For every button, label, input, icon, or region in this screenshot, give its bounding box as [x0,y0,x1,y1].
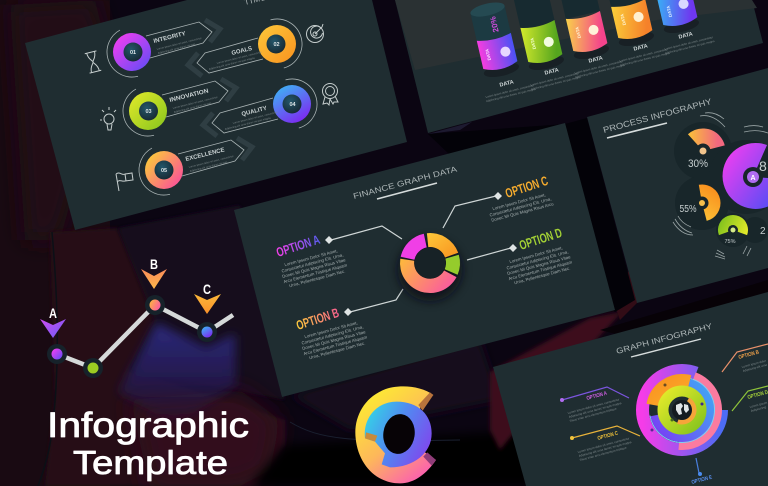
option A [274,232,350,289]
option labels [586,350,768,486]
icon: target [306,24,324,42]
sector: 55 percent [680,189,716,217]
option C: Lorem Ipsum Dolor Sit Amet, [492,192,546,211]
step 05: excellence: 05 [161,168,167,174]
sector: 55 percent: 55% [680,204,697,215]
option D [504,225,575,286]
step 02: goals: Lorem ipsum dolor sit amet, consectetur [216,50,262,65]
arrow A [40,319,66,338]
finance underline [377,183,437,199]
option labels: OPTION A [586,391,608,402]
step 01: integrity: INTEGRITY [153,31,187,45]
step 04: quality: QUALITY [241,106,268,118]
node C [197,322,217,342]
option C: OPTION C [503,173,550,201]
option D: OPTION D [517,225,564,253]
data captions: Adipiscing elit urna donec mi quis magna [665,39,715,55]
option dots [560,398,564,402]
data labels [499,31,694,89]
data captions [485,35,715,103]
option B: Lorem Ipsum Dolor Sit Amet, [304,320,358,339]
step 01: integrity: Adipiscing elit urna donec mi quis [157,42,196,55]
sector: 30 percent [682,130,724,172]
data labels: DATA [499,79,515,89]
graph underline [631,339,701,357]
hex outlines [146,22,278,176]
icon: flag [116,173,133,191]
cylinder 4: DATA [619,12,627,26]
sector: large A [723,143,768,209]
panel: process infography slide [587,68,768,303]
panel: timeline slide [25,0,407,230]
step 04: quality: Lorem ipsum dolor sit amet, consectetur [232,110,278,125]
option labels: OPTION B [738,350,760,361]
step 01: integrity: Lorem ipsum dolor sit amet, consectetur [156,36,202,51]
sector: 30 percent: 30% [688,158,708,170]
step 01: integrity [102,22,202,82]
logo: 3D ring [355,386,436,483]
blue area under line chart [118,323,236,425]
title: Infographic [47,406,249,445]
dark discs [674,122,768,247]
data captions: Adipiscing elit urna donec mi quis magna [531,75,581,91]
finance title: FINANCE GRAPH DATA [352,164,459,201]
donut shadow [398,239,462,301]
step 05: excellence: Adipiscing elit urna donec mi quis [189,160,228,173]
label C: C [203,281,211,297]
data labels: DATA [588,55,604,65]
panel: finance graph data slide [234,123,615,397]
cylinder 3: DATA [574,25,582,39]
data captions: Adipiscing elit urna donec mi quis magna [575,63,625,79]
donut chart [400,233,460,293]
arrow B [141,269,167,289]
data labels: DATA [544,67,560,77]
option lines [562,344,768,473]
graph title: GRAPH INFOGRAPHY [615,321,714,356]
option D: Consectetur Adipiscing Elit. Urna, [506,249,569,271]
option captions: Lorem ipsum dolor sit amet, consectetur [567,397,620,415]
step 02: goals [208,13,308,75]
step 05: excellence: EXCELLENCE [185,147,225,163]
data labels: DATA [678,31,694,41]
sector: 75 percent: 75% [724,239,736,245]
label B: B [150,256,158,272]
step 02: goals: GOALS [231,46,253,57]
panel: graph infography slide [493,292,768,486]
cylinder 1: DATA [484,48,492,61]
option A: Lorem Ipsum Dolor Sit Amet, [284,248,338,267]
lighter back wall [395,0,757,70]
option A: Arcu Elementum Tristique Aliquam [283,262,348,284]
step 02: goals: Adipiscing elit urna donec mi quis magna [208,56,256,71]
step 01: integrity: 01 [130,50,136,56]
option D: Arcu Elementum Tristique Aliquam [508,259,573,281]
option B: Urna, Pellentesque Diam Nec. [309,341,366,360]
option B: OPTION B [294,305,341,333]
option labels: OPTION C [597,431,619,442]
label A: A [49,305,57,321]
cylinder 5 [655,0,700,36]
data captions: Adipiscing elit urna donec mi quis magna [620,51,670,67]
option B: Donec Mi Quis Magna Risus Vitae [302,329,367,351]
sector: large A: 8 [759,158,767,174]
process title: PROCESS INFOGRAPHY [602,96,713,135]
curved seams [38,232,460,486]
step 03: innovation: 03 [145,109,152,115]
radial diagram [637,365,727,455]
option captions: Lorem ipsum [749,400,768,409]
cylinder 2 [512,0,565,73]
step 05: excellence: Lorem ipsum dolor sit amet, consectetur [188,154,234,169]
option D: Lorem Ipsum Dolor Sit Amet, [509,245,563,264]
node A [47,344,67,364]
data captions: Lorem ipsum dolor sit amet, consectetur [664,35,713,51]
step 03: innovation: Lorem ipsum dolor sit amet, consectetur [172,95,218,110]
data captions: Lorem ipsum dolor sit amet, consectetur [619,47,668,63]
option captions: Adipiscing [750,405,767,413]
data captions: Lorem ipsum dolor sit amet, consectetur [530,71,579,87]
icon: hourglass [85,51,101,73]
node B [145,295,165,315]
process underline [607,123,667,138]
cylinder 4 [607,0,655,49]
node green [83,358,103,378]
data labels: DATA [633,43,649,53]
partial disc label: 2 [760,226,766,237]
option labels: OPTION E [691,475,713,486]
chevrons: timeline arrows [188,20,252,160]
option captions [567,359,768,462]
title: Template [73,444,228,481]
option C: Donec Mi Quis Magna Risus Arcu [491,201,555,223]
option A: Urna, Pellentesque Diam Nec. [289,269,346,288]
sector: large A: A [750,175,756,182]
connector diamonds [325,192,517,316]
cylinder 1: 20% [488,16,501,33]
cylinder 1 [469,0,520,80]
option A: OPTION A [274,232,322,260]
data captions: Lorem ipsum dolor sit amet, consectetur [485,83,534,99]
option captions: Adipiscing elit urna donec mi quis magna [568,401,622,419]
option D: Urna, Pellentesque Diam Nec. [514,266,571,285]
arrow C [194,294,221,314]
data captions: Lorem ipsum dolor sit amet, consectetur [574,59,623,75]
step 04: quality [224,73,323,135]
step 05: excellence [134,140,234,200]
option A: Consectetur Adipiscing Elit. Urna, [281,252,344,274]
cylinder 3 [559,0,610,62]
data captions: Adipiscing elit urna donec mi quis magna [486,87,536,103]
icon: light bulb [100,107,116,130]
title [47,406,249,481]
step 04: quality: Adipiscing elit urna donec mi quis magna [224,116,272,131]
step 02: goals: 02 [273,42,280,48]
option B: Consectetur Adipiscing Elit. Urna, [301,324,364,346]
icon: medal [322,84,338,105]
option A: Donec Mi Quis Magna Risus Vitae [282,257,347,279]
sector: 75 percent [720,217,746,245]
option C: Consectetur Adipiscing Elit. Urna, [489,196,552,218]
option B [294,305,370,361]
option captions: Adipiscing elit urna donec mi quis magna [578,440,632,458]
step 03: innovation [118,81,218,141]
step 03: innovation: INNOVATION [169,88,209,104]
option B: Arcu Elementum Tristique Aliquam [303,334,368,356]
cylinder 2: DATA [529,36,537,50]
panel: data cylinders slide [395,0,763,133]
line chart with markers [40,256,233,378]
option C [488,173,555,223]
option captions: Lorem ipsum dolor [741,359,766,369]
option captions: Adipiscing elit urna [742,363,768,373]
decorative arcs [673,113,768,259]
option captions: Risus vitae arcu elementum tristique [579,446,627,462]
option D: Donec Mi Quis Magna Risus Vitae [507,254,572,276]
option captions: Risus vitae arcu elementum tristique [569,407,617,423]
option captions: Lorem ipsum dolor sit amet, consectetur [577,436,630,454]
step 03: innovation: Adipiscing elit urna donec mi quis [173,101,212,114]
step 04: quality: 04 [289,102,296,108]
cylinder 5: DATA [665,4,673,18]
connector lines [331,196,511,312]
